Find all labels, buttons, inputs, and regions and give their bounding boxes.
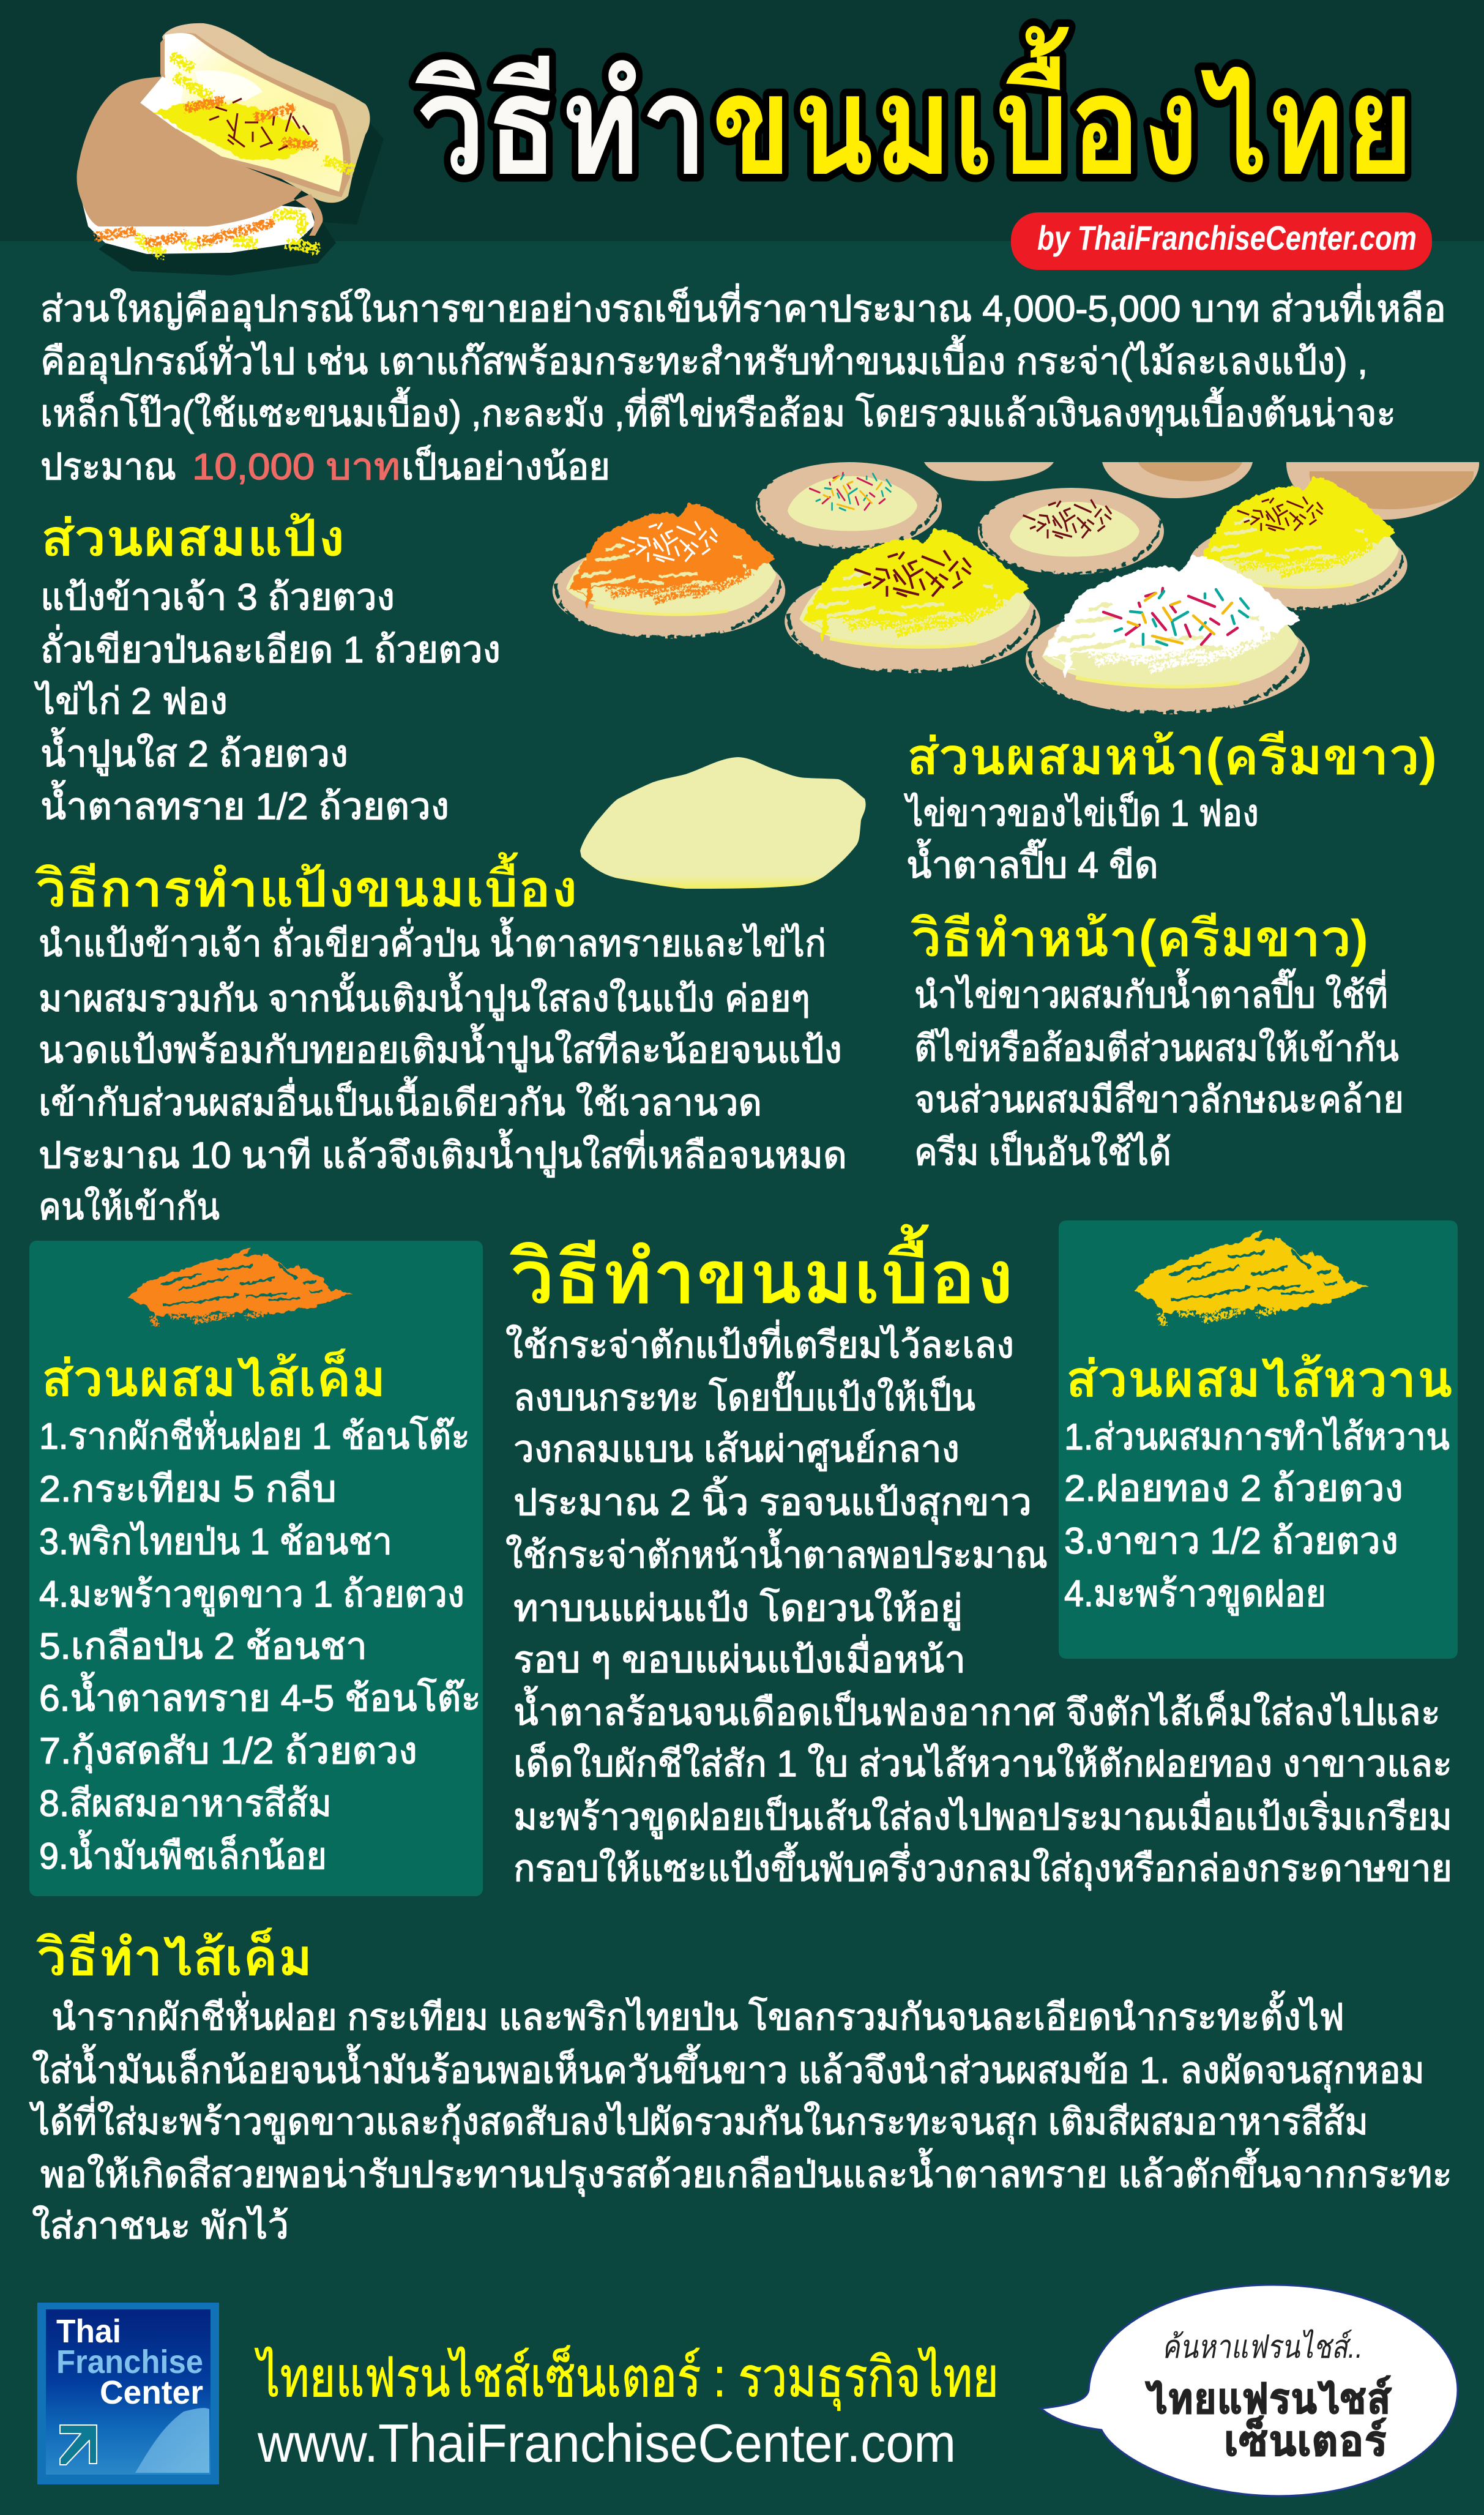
callout: speech bubble: ค้นหาแฟรนไชส์..: [1162, 2329, 1363, 2365]
text: how to make Thai crepes: วงกลมแบน เส้นผ่าศูนย์กลาง: [513, 1429, 960, 1471]
text: making the savoury filling: ใส่ภาชนะ พักไว้: [32, 2205, 289, 2246]
list: savoury filling: 8.สีผสมอาหารสีส้ม: [39, 1783, 332, 1824]
intro paragraph: [40, 283, 1446, 487]
heading: making the batter: วิธีการทำแป้งขนมเบื้อง: [35, 852, 578, 917]
list: sweet filling: [1064, 1416, 1450, 1616]
text: how to make Thai crepes: ประมาณ 2 นิ้ว รอจนแป้งสุกขาว: [513, 1476, 1032, 1525]
crepe: plain with dark sprinkles: [978, 488, 1164, 575]
title: วิธีทำ: [415, 48, 709, 204]
illustration: plate of Thai crepes: [553, 462, 1479, 714]
text: making the batter: เข้ากับส่วนผสมอื่นเป็นเนื้อเดียวกัน ใช้เวลานวด: [39, 1076, 762, 1123]
logo: Thai Franchise Center: Center: [100, 2374, 203, 2411]
text: how to make Thai crepes: ทาบนแผ่นแป้ง โดยวนให้อยู่: [513, 1587, 963, 1631]
tagline: ไทยแฟรนไชส์เซ็นเตอร์ : รวมธุรกิจไทย: [255, 2344, 999, 2411]
list: dough ingredients: [34, 577, 501, 827]
text: making the batter: [39, 917, 847, 1227]
text: making the batter: นำแป้งข้าวเจ้า ถั่วเขียวคั่วป่น น้ำตาลทรายและไข่ไก่: [39, 917, 826, 964]
icon: golden floss: [1135, 1231, 1368, 1325]
text: making the savoury filling: ได้ที่ใส่มะพร้าวขูดขาวและกุ้งสดสับลงไปผัดรวมกันในกระทะจนสุก เติมสีผสมอาหารสีส้ม: [29, 2096, 1368, 2144]
text: how to make Thai crepes: เด็ดใบผักชีใส่สัก 1 ใบ ส่วนไส้หวานให้ตักฝอยทอง งาขาวและ: [513, 1742, 1452, 1784]
list: savoury filling: 7.กุ้งสดสับ 1/2 ถ้วยตวง: [39, 1730, 417, 1773]
text: making the savoury filling: ใส่น้ำมันเล็กน้อยจนน้ำมันร้อนพอเห็นควันขึ้นขาว แล้วจึงนำส่วนผสมข้อ 1. ลงผัดจนสุกหอม: [32, 2044, 1425, 2093]
cut-off plain dishes: [924, 462, 1479, 520]
list: dough ingredients: ถั่วเขียวป่นละเอียด 1 ถ้วยตวง: [40, 624, 501, 670]
text: making the topping: ตีไข่หรือส้อมตีส่วนผสมให้เข้ากัน: [914, 1027, 1399, 1069]
text: making the topping: จนส่วนผสมมีสีขาวลักษณะคล้าย: [914, 1079, 1404, 1120]
list: sweet filling: 1.ส่วนผสมการทำไส้หวาน: [1064, 1416, 1450, 1457]
heading: dough ingredients: ส่วนผสมแป้ง: [40, 509, 345, 567]
list: sweet filling: 4.มะพร้าวขูดฝอย: [1064, 1573, 1326, 1616]
text: making the topping: ครีม เป็นอันใช้ได้: [914, 1130, 1171, 1173]
text: making the topping: นำไข่ขาวผสมกับน้ำตาลปี๊บ ใช้ที่: [914, 968, 1388, 1015]
list: dough ingredients: น้ำตาลทราย 1/2 ถ้วยตวง: [40, 780, 449, 827]
text: how to make Thai crepes: กรอบให้แซะแป้งขึ้นพับครึ่งวงกลมใส่ถุงหรือกล่องกระดาษขาย: [513, 1842, 1452, 1891]
list: sweet filling: 2.ฝอยทอง 2 ถ้วยตวง: [1064, 1468, 1403, 1509]
intro paragraph: เหล็กโป๊ว(ใช้แซะขนมเบื้อง) ,กะละมัง ,ที่ตีไข่หรือส้อม โดยรวมแล้วเงินลงทุนเบื้องต้นน่าจะ: [40, 387, 1396, 436]
white bottom fold: [77, 182, 315, 254]
text: how to make Thai crepes: ใช้กระจ่าตักแป้งที่เตรียมไว้ละเลง: [505, 1320, 1014, 1366]
crepe: yellow topping, right: [1188, 477, 1408, 610]
list: topping ingredients: ไข่ขาวของไข่เป็ด 1 ฟอง: [904, 791, 1259, 834]
panel: savoury filling: [29, 1241, 483, 1896]
icon: arrow: [60, 2425, 97, 2465]
panel: sweet filling: [1059, 1220, 1458, 1659]
callout: speech bubble: [1041, 2285, 1458, 2496]
text: making the batter: ประมาณ 10 นาที แล้วจึงเติมน้ำปูนใสที่เหลือจนหมด: [39, 1129, 847, 1178]
heading: making the savoury filling: วิธีทำไส้เค็ม: [36, 1927, 313, 1986]
text: how to make Thai crepes: [505, 1320, 1452, 1891]
intro paragraph: ประมาณ: [40, 446, 176, 487]
list: savoury filling: 4.มะพร้าวขูดขาว 1 ถ้วยตวง: [39, 1574, 464, 1616]
list: savoury filling: 5.เกลือป่น 2 ช้อนชา: [39, 1626, 367, 1667]
heading: making the topping: วิธีทำหน้า(ครีมขาว): [911, 910, 1368, 967]
list: dough ingredients: น้ำปูนใส 2 ถ้วยตวง: [40, 727, 348, 776]
logo: Thai Franchise Center: [37, 2303, 219, 2484]
list: topping ingredients: น้ำตาลปี๊บ 4 ขีด: [906, 839, 1158, 886]
list: savoury filling: 3.พริกไทยป่น 1 ช้อนชา: [39, 1520, 392, 1562]
logo: Thai Franchise Center: Franchise: [56, 2344, 203, 2380]
callout: speech bubble: เซ็นเตอร์: [1224, 2416, 1387, 2465]
text: how to make Thai crepes: มะพร้าวขูดฝอยเป็นเส้นใส่ลงไปพอประมาณเมื่อแป้งเริ่มเกรียม: [513, 1792, 1452, 1839]
heading: savoury filling: ส่วนผสมไส้เค็ม: [41, 1348, 386, 1407]
badge: by ThaiFranchiseCenter.com: [1011, 212, 1432, 270]
illustration: dough blob: [580, 757, 866, 889]
list: dough ingredients: ไข่ไก่ 2 ฟอง: [34, 680, 228, 722]
heading: topping ingredients: ส่วนผสมหน้า(ครีมขาว): [906, 728, 1437, 785]
text: how to make Thai crepes: น้ำตาลร้อนจนเดือดเป็นฟองอากาศ จึงตักไส้เค็มใส่ลงไปและ: [513, 1686, 1441, 1733]
list: savoury filling: 2.กระเทียม 5 กลีบ: [39, 1468, 337, 1509]
heading: sweet filling: ส่วนผสมไส้หวาน: [1065, 1350, 1453, 1408]
intro paragraph: 10,000 บาท: [192, 446, 400, 487]
white flap: [140, 77, 184, 129]
list: topping ingredients: [904, 791, 1259, 886]
logo: Thai Franchise Center: Thai: [56, 2313, 121, 2350]
crepe: orange topping: [553, 503, 785, 638]
header band: [0, 0, 1484, 241]
intro paragraph: คืออุปกรณ์ทั่วไป เช่น เตาแก๊สพร้อมกระทะสำหรับทำขนมเบื้อง กระจ่า(ไม้ละเลงแป้ง) ,: [40, 335, 1368, 384]
list: dough ingredients: แป้งข้าวเจ้า 3 ถ้วยตวง: [40, 577, 395, 618]
text: making the batter: คนให้เข้ากัน: [39, 1186, 220, 1227]
crepe: white topping with coloured sprinkles: [1026, 555, 1310, 714]
list: savoury filling: 9.น้ำมันพืชเล็กน้อย: [39, 1829, 327, 1877]
text: how to make Thai crepes: ใช้กระจ่าตักหน้าน้ำตาลพอประมาณ: [505, 1528, 1048, 1575]
icon: folded Thai crepe: [76, 23, 384, 275]
text: how to make Thai crepes: ลงบนกระทะ โดยปั๊บแป้งให้เป็น: [513, 1371, 975, 1418]
callout: speech bubble: ไทยแฟรนไชส์: [1145, 2375, 1392, 2423]
list: sweet filling: 3.งาขาว 1/2 ถ้วยตวง: [1064, 1520, 1398, 1561]
text: making the savoury filling: พอให้เกิดสีสวยพอน่ารับประทานปรุงรสด้วยเกลือป่นและน้ำตาลทราย แล้วตักขึ้นจากกระทะ: [40, 2148, 1452, 2197]
icon: orange floss: [129, 1249, 352, 1326]
heading: how to make Thai crepes: วิธีทำขนมเบื้อง: [509, 1224, 1014, 1319]
list: savoury filling: 6.น้ำตาลทราย 4-5 ช้อนโต๊ะ: [39, 1672, 481, 1719]
title: [415, 26, 1415, 204]
text: making the savoury filling: [29, 1990, 1452, 2246]
list: savoury filling: 1.รากผักชีหั่นฝอย 1 ช้อนโต๊ะ: [39, 1411, 470, 1457]
text: making the batter: นวดแป้งพร้อมกับทยอยเติมน้ำปูนใสทีละน้อยจนแป้ง: [39, 1023, 842, 1072]
list: savoury filling: [39, 1411, 481, 1877]
text: making the batter: มาผสมรวมกัน จากนั้นเติมน้ำปูนใสลงในแป้ง ค่อยๆ: [39, 972, 810, 1021]
intro paragraph: ส่วนใหญ่คืออุปกรณ์ในการขายอย่างรถเข็นที่ราคาประมาณ 4,000-5,000 บาท ส่วนที่เหลือ: [40, 283, 1446, 331]
intro paragraph: เป็นอย่างน้อย: [401, 445, 610, 487]
text: making the savoury filling: นำรากผักชีหั่นฝอย กระเทียม และพริกไทยป่น โขลกรวมกันจนละเอียดนำกระทะตั้งไฟ: [51, 1990, 1344, 2038]
website address: www.ThaiFranchiseCenter.com: [257, 2413, 956, 2473]
text: how to make Thai crepes: รอบ ๆ ขอบแผ่นแป้งเมื่อหน้า: [513, 1634, 966, 1680]
crepe: plain with coloured sprinkles: [756, 462, 942, 549]
crepe: yellow topping: [785, 529, 1040, 673]
brown front shell: [76, 77, 323, 236]
text: making the topping: [914, 968, 1404, 1173]
